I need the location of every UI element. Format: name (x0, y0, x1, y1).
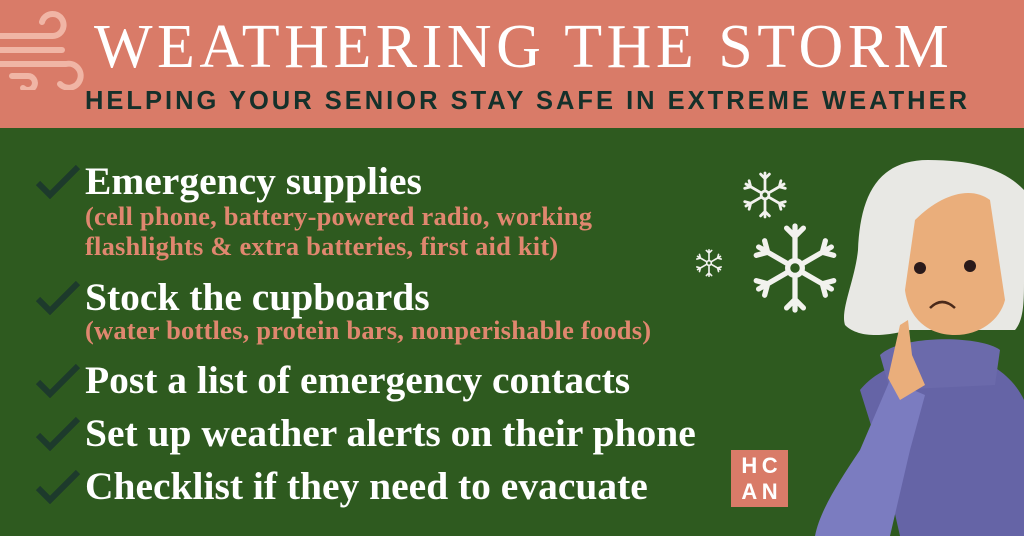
note 2: (water bottles, protein bars, nonperishable foods) (85, 315, 651, 345)
note 1 (85, 201, 592, 261)
hair back (844, 160, 1024, 335)
note 1: flashlights & extra batteries, first aid kit) (85, 231, 558, 261)
body (860, 355, 1024, 536)
item 4: Set up weather alerts on their phone (85, 411, 696, 455)
logo HCAN: A N (741, 479, 778, 504)
snowflakes (696, 172, 836, 313)
snowflake large (754, 226, 836, 310)
mouth (930, 302, 955, 308)
illustration: worried senior woman (815, 160, 1024, 536)
snowflake small top (744, 173, 786, 217)
check 1 (36, 165, 80, 199)
eyes (914, 262, 926, 274)
snowflake tiny (696, 250, 722, 276)
item 5: Checklist if they need to evacuate (85, 464, 648, 508)
item 1: Emergency supplies (85, 159, 422, 203)
subtitle: HELPING YOUR SENIOR STAY SAFE IN EXTREME WEATHER (85, 87, 970, 115)
note 1: (cell phone, battery-powered radio, working (85, 201, 592, 231)
item 3: Post a list of emergency contacts (85, 358, 630, 402)
check 3 (36, 364, 80, 398)
check 2 (36, 281, 80, 315)
item 2: Stock the cupboards (85, 275, 430, 319)
header banner (0, 0, 1024, 128)
face (905, 193, 1005, 335)
logo HCAN (731, 450, 788, 507)
check 4 (36, 417, 80, 451)
turtleneck (880, 339, 1000, 390)
check 5 (36, 470, 80, 504)
hand (888, 320, 925, 400)
title: WEATHERING THE STORM (94, 13, 953, 81)
arm (815, 380, 925, 536)
icon: wind (0, 11, 84, 90)
logo HCAN: H C (741, 453, 778, 478)
